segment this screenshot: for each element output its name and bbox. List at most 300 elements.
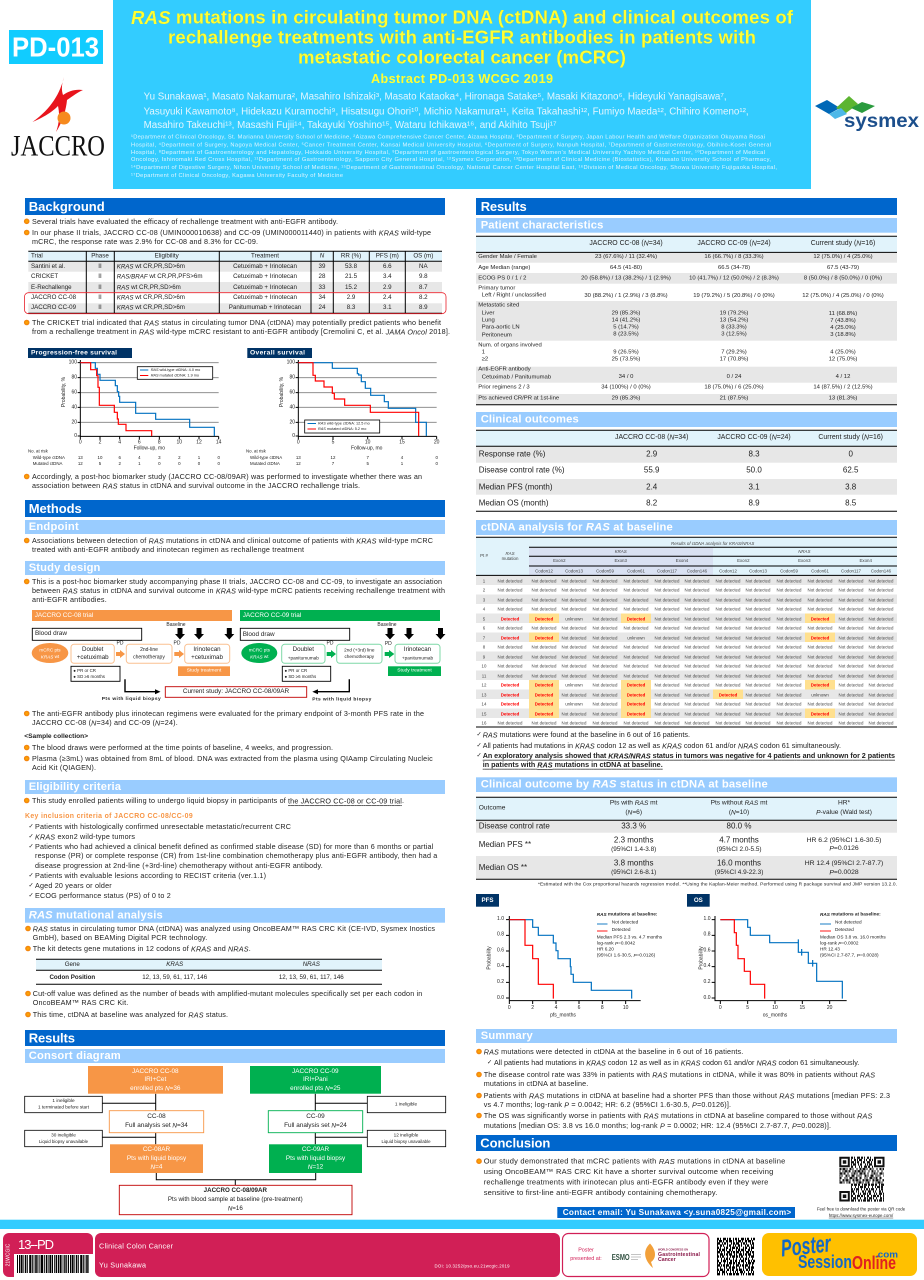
table: ctDNA analysis: Not detected	[716, 606, 741, 611]
bullets: cut-off	[25, 989, 422, 1019]
chart: overall survival: 20	[289, 419, 295, 425]
table: ctDNA analysis: Not detected	[808, 654, 833, 659]
table: ctDNA analysis: unknown	[811, 692, 829, 697]
summary text: Patients with RAS mutations in ctDNA at baseline had a shorter PFS than those without RAS mutations [median PFS: 2.3	[484, 1091, 890, 1100]
table: codon positions: Codon Position	[49, 974, 95, 981]
table: ctDNA analysis: Not detected	[624, 587, 649, 592]
consort diagram: Liquid biopsy unavailable	[39, 1139, 89, 1144]
table: ctDNA analysis: Not detected	[685, 663, 710, 668]
chart: OS by RAS status: 0.0	[704, 995, 711, 1001]
notes under ctDNA table: in patients with RAS mutations in ctDNA at baseline.	[483, 760, 663, 769]
chart: progression-free survival: Mutated ctDNA	[33, 461, 63, 466]
table: clinical outcomes: 2.9	[646, 450, 658, 458]
table: ctDNA analysis: Not detected	[624, 673, 649, 678]
table: ctDNA analysis: Not detected	[808, 701, 833, 706]
diagram: study design CC-09: +panitumumab	[402, 656, 433, 660]
key inclusion criteria: ✓	[28, 882, 34, 889]
table: ctDNA analysis: Results of ctDNA analysis for KRAS/NRAS	[671, 541, 754, 546]
heading: Consort diagram	[25, 1049, 445, 1063]
table: ctDNA analysis: Not detected	[808, 644, 833, 649]
authors: Yu Sunakawa¹, Masato Nakamura², Masahiro Ishizaki³, Masato Kataoka⁴, Hironaga Satake⁵, Masaki Kitazono⁶, Hideyuki Yanagisawa⁷,	[144, 92, 727, 102]
table: ctDNA analysis: Not detected	[562, 606, 587, 611]
table: ctDNA analysis: Not detected	[746, 701, 771, 706]
table: ctDNA analysis: Not detected	[498, 597, 523, 602]
summary text: All patients had mutations in KRAS codon 12 as well as in KRAS codon 61 and/or NRAS codon 61 simultaneously.	[494, 1058, 859, 1067]
chart: PFS by RAS status: 0.2	[497, 979, 504, 985]
table: ctDNA analysis: Exon2	[553, 558, 566, 563]
table: patient characteristics: 7 (43.8%)	[830, 318, 856, 324]
table: prior rechallenge trials: 39	[319, 263, 326, 270]
table: patient characteristics: Anti-EGFR antibody	[478, 367, 531, 373]
chart: overall survival: RAS mutated ctDNA: 5.2 mo	[318, 427, 366, 431]
table: ctDNA analysis: Detected	[811, 711, 830, 716]
logo: sysmex	[815, 96, 919, 132]
table: outcome by RAS status: 16.0 months	[717, 858, 761, 868]
sample collection: <Sample collection>	[24, 733, 88, 740]
table: ctDNA analysis: Not detected	[869, 720, 894, 725]
chart: PFS by RAS status: log-rank P=0.0042	[597, 940, 636, 946]
table: ctDNA analysis: Not detected	[685, 587, 710, 592]
consort diagram: Pts with blood sample at baseline (pre-treatment)	[168, 1196, 303, 1203]
table: patient characteristics: 7 (29.2%)	[721, 349, 747, 355]
consort diagram: Pts with liquid biopsy	[286, 1155, 346, 1162]
table: ctDNA analysis: 6	[483, 625, 486, 630]
table: ctDNA analysis: Not detected	[869, 578, 894, 583]
table: ctDNA analysis: Codon59	[780, 568, 798, 573]
table: ctDNA analysis: Not detected	[746, 654, 771, 659]
table: outcome by RAS status: P=0.0028	[829, 869, 859, 876]
summary text: RAS mutations were detected in ctDNA at the baseline in 6 out of 16 patients.	[484, 1047, 743, 1056]
poster title: metastatic colorectal cancer (mCRC)	[298, 46, 626, 68]
consort diagram: N=12	[308, 1163, 324, 1170]
table: ctDNA analysis: 12	[482, 682, 487, 687]
table: ctDNA analysis: Not detected	[562, 663, 587, 668]
chart: OS by RAS status: 0	[719, 1005, 722, 1011]
table: ctDNA analysis: Not detected	[777, 711, 802, 716]
table: ctDNA analysis: Not detected	[655, 673, 680, 678]
chart: OS by RAS status: 15	[800, 1005, 805, 1011]
notes under ctDNA table: ✓	[476, 752, 482, 759]
chart: progression-free survival: 3	[158, 455, 161, 460]
table: ctDNA analysis: Exon4	[859, 558, 872, 563]
table: outcome by RAS status: Median OS **	[479, 863, 527, 872]
chart: progression-free survival: 100	[69, 360, 77, 366]
table: ctDNA analysis: Not detected	[498, 578, 523, 583]
heading: Results: Results	[29, 1030, 75, 1046]
table: ctDNA analysis: Not detected	[839, 711, 864, 716]
footer: poster presented at: WORLD CONGRESS ON	[658, 1248, 688, 1252]
heading: Summary: Summary	[481, 1030, 533, 1042]
table: ctDNA analysis: Not detected	[716, 635, 741, 640]
table: ctDNA analysis: Not detected	[746, 673, 771, 678]
diagram: study design CC-08: PD	[174, 641, 181, 647]
heading: Methods: Methods	[29, 501, 82, 516]
table: patient characteristics: JACCRO CC-09 (N=24)	[697, 240, 771, 247]
consort diagram: CC-09	[306, 1113, 325, 1120]
chart: progression-free survival: 0	[158, 461, 161, 466]
table: patient characteristics: 17 (70.8%)	[720, 356, 748, 362]
table: outcome by RAS status	[476, 797, 897, 887]
sample collection: The blood draws were performed at the time points of baseline, 4 weeks, and progression.	[32, 743, 333, 752]
table: ctDNA analysis: Not detected	[655, 701, 680, 706]
heading: ctDNA analysis: ctDNA analysis for RAS at baseline	[481, 522, 673, 534]
chart: overall survival: 80	[289, 375, 295, 381]
table: prior rechallenge trials: 8.9	[419, 304, 428, 311]
heading: Clinical outcomes: Clinical outcomes	[481, 414, 579, 426]
table: patient characteristics: 8 (50.0%) / 8 (50.0%) / 0 (0%)	[804, 275, 882, 281]
table: patient characteristics: 21 (87.5%)	[720, 396, 748, 402]
chart: progression-free survival: 40	[71, 404, 77, 410]
table: patient characteristics: 18 (75.0%) / 6 (25.0%)	[704, 385, 764, 391]
table: outcome by RAS status: 4.7 months	[719, 836, 759, 844]
heading: Background: Background	[29, 199, 105, 214]
table: clinical outcomes: 8.9	[748, 498, 760, 508]
table: codon positions: 12, 13, 59, 61, 117, 146	[142, 974, 208, 981]
chart: PFS by RAS status: PFS	[481, 897, 494, 904]
table: ctDNA analysis: Not detected	[839, 654, 864, 659]
table: ctDNA analysis: Not detected	[562, 625, 587, 630]
chart: PFS by RAS status: pfs_months	[550, 1012, 576, 1018]
table: patient characteristics: Metastatic sited	[478, 303, 519, 309]
chart: overall survival: 7	[366, 455, 369, 460]
table: ctDNA analysis: Not detected	[777, 597, 802, 602]
summary text: ✓	[487, 1059, 492, 1066]
table: outcome by RAS status: P-value (Wald test)	[816, 809, 872, 816]
table: outcome by RAS status: Pts with RAS mt	[610, 800, 658, 806]
table: ctDNA analysis: 10	[482, 663, 487, 668]
table: ctDNA analysis: Not detected	[746, 692, 771, 697]
table: ctDNA analysis: Not detected	[746, 587, 771, 592]
table: ctDNA analysis: 13	[482, 692, 487, 697]
consort diagram: enrolled pts N=25	[290, 1085, 341, 1092]
table: ctDNA analysis: Not detected	[808, 673, 833, 678]
table: ctDNA analysis: Not detected	[777, 720, 802, 725]
table: patient characteristics: 23 (67.6%) / 11 (32.4%)	[595, 254, 657, 260]
table: ctDNA analysis: Not detected	[869, 673, 894, 678]
table: ctDNA analysis: Not detected	[562, 587, 587, 592]
chart: progression-free survival: 4	[118, 440, 121, 446]
key inclusion criteria: ✓	[28, 892, 34, 899]
table: ctDNA analysis: Detected	[627, 692, 646, 697]
diagram: study design CC-09: mCRC pts	[249, 648, 271, 652]
footer: PosterSessionOnline logo: .com	[875, 1250, 898, 1260]
chart: progression-free survival: 1	[198, 455, 201, 460]
heading: Summary	[476, 1029, 897, 1043]
diagram: study design CC-08: +cetuximab	[77, 654, 109, 661]
table: patient characteristics: 13 (81.3%)	[829, 396, 857, 402]
chart: overall survival: 12	[331, 455, 336, 460]
table: patient characteristics: 64.5 (41-80)	[610, 265, 642, 271]
consort diagram: N=16	[228, 1205, 243, 1212]
consort diagram: CC-09AR	[302, 1146, 330, 1153]
table: ctDNA analysis: Not detected	[839, 663, 864, 668]
chart: OS by RAS status: Median OS 3.8 vs. 16.0 months	[820, 934, 886, 940]
chart: progression-free survival: 2	[99, 440, 102, 446]
table: clinical outcomes	[476, 430, 897, 511]
table: outcome by RAS status: (95%CI 4.9-22.3)	[715, 869, 763, 876]
table: ctDNA analysis: Not detected	[839, 692, 864, 697]
table: ctDNA analysis: Detected	[535, 701, 554, 706]
table: ctDNA analysis: Not detected	[869, 663, 894, 668]
table: outcome by RAS status: HR 6.2 (95%CI 1.6-30.5)	[807, 837, 881, 844]
logo: JACCRO: JACCRO	[11, 130, 105, 162]
heading: Clinical outcome by RAS status: Clinical outcome by RAS status in ctDNA at baseline	[481, 779, 768, 791]
chart: PFS by RAS status: HR 6.20	[597, 946, 614, 952]
table: prior rechallenge trials: 8.3	[347, 304, 356, 311]
table: ctDNA analysis: 14	[482, 701, 487, 706]
heading: Conclusion: Conclusion	[480, 1136, 550, 1150]
table: ctDNA analysis: Codon59	[596, 568, 614, 573]
diagram: study design CC-09	[240, 610, 446, 681]
table: ctDNA analysis: Not detected	[624, 578, 649, 583]
table: prior rechallenge trials: 15.2	[345, 284, 358, 291]
conclusion text	[476, 1156, 785, 1197]
bullets: intro: Several trials have evaluated the efficacy of rechallenge treatment with anti-EGFR antibody.	[32, 217, 338, 226]
consort diagram	[25, 1066, 446, 1215]
bullets: intro	[24, 217, 431, 246]
chart: progression-free survival: Probability, %	[61, 376, 67, 407]
bullets: RAS assay: GmbH), based on BEAMing Digital PCR technology.	[33, 933, 207, 942]
bullets: cut-off: This time, ctDNA at baseline was analyzed for RAS status.	[33, 1010, 228, 1019]
diagram: study design CC-08: ● PR or CR	[73, 668, 96, 673]
contact email: Contact email: Yu Sunakawa <y.suna0825@gmail.com>	[563, 1208, 791, 1217]
table: ctDNA analysis: Not detected	[562, 692, 587, 697]
table: prior rechallenge trials	[24, 251, 446, 314]
chart: overall survival: Wild-type ctDNA	[250, 455, 282, 460]
table: ctDNA analysis: Not detected	[685, 692, 710, 697]
table: ctDNA analysis: Not detected	[498, 644, 523, 649]
table: ctDNA analysis: Detected	[535, 616, 554, 621]
table: ctDNA analysis: Exon3	[798, 558, 811, 563]
table: ctDNA analysis: Not detected	[685, 635, 710, 640]
chart: progression-free survival: 2	[118, 461, 121, 466]
chart: overall survival: 5	[366, 461, 369, 466]
bullet: primary endpoint: JACCRO CC-08 (N=34) and CC-09 (N=24).	[32, 718, 178, 727]
table: ctDNA analysis: Not detected	[808, 663, 833, 668]
chart: PFS by RAS status: RAS mutations at baseline:	[597, 912, 658, 917]
table: ctDNA analysis: Not detected	[808, 578, 833, 583]
table: ctDNA analysis: 5	[483, 616, 486, 621]
table: outcome by RAS status: (95%CI 2.0-5.5)	[716, 846, 762, 853]
footer: PosterSessionOnline logo	[762, 1230, 917, 1276]
table: ctDNA analysis: Not detected	[869, 701, 894, 706]
table: patient characteristics: Num. of organs involved	[478, 343, 542, 349]
diagram: study design CC-08	[32, 610, 234, 681]
table: patient characteristics: Lung	[482, 318, 495, 324]
table: patient characteristics: 29 (85.3%)	[612, 310, 640, 316]
chart: OS by RAS status: 20	[827, 1005, 833, 1011]
table: outcome by RAS status: (N=6)	[625, 809, 642, 816]
bullet: study design text: This is a post-hoc biomarker study accompanying phase II trials, JACCRO CC-08 and CC-09, to investigate an association	[32, 577, 442, 586]
table: patient characteristics: 14 (41.2%)	[612, 317, 640, 323]
table: patient characteristics: 19 (79.2%) / 5 (20.8%) / 0 (0%)	[693, 293, 775, 299]
poster id badge: PD-013	[12, 32, 99, 62]
table: ctDNA analysis: Detected	[501, 711, 520, 716]
heading: Methods	[25, 500, 445, 517]
table: ctDNA analysis: Not detected	[839, 720, 864, 725]
current study box with arrows	[102, 679, 372, 703]
table: ctDNA analysis: Not detected	[716, 682, 741, 687]
bullet: study design text: between RAS status in ctDNA and survival outcome in KRAS wild-type mCRC patients receiving rechallenge treatment with	[32, 586, 445, 595]
heading: Background	[25, 198, 445, 215]
table: prior rechallenge trials: KRAS wt CR,PR,SD>6m	[117, 304, 185, 311]
chart: OS by RAS status: 1.0	[704, 916, 711, 922]
heading: Results	[476, 198, 897, 215]
footer: session info	[95, 1233, 560, 1277]
table: ctDNA analysis: unknown	[565, 616, 583, 621]
diagram: study design CC-08: Irinotecan	[193, 646, 221, 653]
diagram: study design CC-08: Baseline	[166, 622, 186, 628]
table: clinical outcomes: Disease control rate (%)	[479, 466, 565, 474]
chart: PFS by RAS status: Probability	[486, 946, 492, 970]
table: ctDNA analysis: Not detected	[593, 673, 618, 678]
diagram: study design CC-08: Doublet	[82, 646, 104, 653]
table: ctDNA analysis: Detected	[627, 616, 646, 621]
chart: progression-free survival: 2	[178, 455, 181, 460]
table: ctDNA analysis: KRAS	[615, 549, 627, 554]
table: ctDNA analysis: Not detected	[532, 578, 557, 583]
chart: OS by RAS status: Probability	[698, 946, 704, 970]
abstract line: Abstract PD-013 WCGC 2019	[371, 72, 553, 86]
chart: overall survival: 0	[297, 440, 300, 446]
chart: PFS by RAS status: 8	[601, 1005, 604, 1011]
table: ctDNA analysis: Not detected	[685, 701, 710, 706]
diagram: study design CC-09: Irinotecan	[404, 646, 432, 653]
table: ctDNA analysis: Not detected	[655, 720, 680, 725]
chart: PFS by RAS status: 4	[555, 1005, 558, 1011]
table: prior rechallenge trials: JACCRO CC-09	[31, 304, 77, 311]
table: outcome by RAS status: HR 12.4 (95%CI 2.7-87.7)	[805, 860, 883, 867]
table: ctDNA analysis: Not detected	[624, 644, 649, 649]
table: ctDNA analysis: Not detected	[498, 606, 523, 611]
chart: OS by RAS status: os_months	[763, 1013, 788, 1019]
chart: OS by RAS status: 5	[746, 1005, 749, 1011]
table: patient characteristics: ≥2	[482, 357, 488, 363]
table: ctDNA analysis: RAS	[505, 551, 515, 556]
key inclusion criteria: ✓	[28, 843, 34, 850]
table: ctDNA analysis: Not detected	[777, 587, 802, 592]
diagram: study design CC-09: chemotherapy	[344, 654, 375, 659]
table: outcome by RAS status: HR*	[838, 800, 850, 806]
table: outcome by RAS status: Outcome	[479, 804, 506, 812]
table: ctDNA analysis: Not detected	[685, 597, 710, 602]
table: ctDNA analysis: Not detected	[716, 616, 741, 621]
table: ctDNA analysis: Not detected	[655, 578, 680, 583]
bullets: cut-off: OncoBEAM™ RAS CRC Kit.	[33, 998, 128, 1007]
key inclusion criteria: response (PR) or complete response (CR) from 1st-line combination chemotherapy plus anti-EGFR antibody, then had a	[35, 851, 437, 860]
table: ctDNA analysis: Codon146	[871, 568, 892, 573]
table: ctDNA analysis: Not detected	[532, 625, 557, 630]
table: patient characteristics: 19 (79.2%)	[720, 310, 748, 316]
summary text: vs 4.7 months; log-rank P = 0.0042; HR: 6.2 (95%CI 1.6-30.5, P=0.0126)].	[484, 1100, 731, 1109]
table: outcome by RAS status: Disease control rate	[479, 822, 550, 830]
chart: PFS by RAS status: 1.0	[497, 916, 504, 922]
table: clinical outcomes: JACCRO CC-08 (N=34)	[615, 434, 688, 441]
summary text	[476, 1047, 890, 1130]
table: ctDNA analysis: Not detected	[532, 720, 557, 725]
bullet: study design text	[24, 577, 445, 604]
table: codon positions: 12, 13, 59, 61, 117, 146	[279, 974, 344, 981]
table: ctDNA analysis: Not detected	[655, 635, 680, 640]
table: ctDNA analysis: Not detected	[808, 587, 833, 592]
table: ctDNA analysis: Not detected	[869, 692, 894, 697]
table: ctDNA analysis: Not detected	[655, 682, 680, 687]
diagram: study design CC-08: 2nd-line	[140, 647, 158, 653]
table: ctDNA analysis: Not detected	[777, 654, 802, 659]
table: prior rechallenge trials: Santini et al.	[31, 263, 65, 270]
consort diagram: 12 ineligible	[394, 1132, 419, 1138]
bullet: CRICKET: from a rechallenge treatment in RAS wild-type mCRC resistant to anti-EGFR antibody [Cremolini C, et al. JAMA Oncol 2018].	[32, 327, 450, 336]
table: clinical outcomes: Median OS (month)	[479, 498, 549, 508]
chart: overall survival: 1	[401, 461, 404, 466]
table: patient characteristics: Liver	[482, 311, 495, 317]
table: ctDNA analysis: Not detected	[839, 635, 864, 640]
affiliations: Hospital, ⁸Department of Gastroenterology and Hepatology, Hokkaido University Hospital, ⁹Department of gastroenterological Surgery, Tokyo Women's Medical University Yachiyo Medical Center, ¹⁰Department of Medical	[131, 149, 765, 156]
table: ctDNA analysis: Detected	[627, 682, 646, 687]
table: ctDNA analysis: Not detected	[685, 625, 710, 630]
table: clinical outcomes: 62.5	[843, 466, 859, 474]
diagram: study design CC-08: mCRC pts	[39, 648, 61, 652]
heading: Eligibility criteria	[25, 780, 445, 794]
table: patient characteristics: 30 (88.2%) / 1 (2.9%) / 3 (8.8%)	[584, 293, 668, 299]
consort diagram: 30 ineligible	[51, 1132, 76, 1138]
table: patient characteristics: 13 (54.2%)	[720, 317, 748, 323]
footer: poster presented at: Poster	[578, 1248, 594, 1254]
table: ctDNA analysis: Not detected	[685, 682, 710, 687]
chart: progression-free survival: Follow-up, mo	[134, 445, 165, 451]
table: ctDNA analysis: unknown	[565, 701, 583, 706]
table: prior rechallenge trials: KRAS wt CR,PR,SD>6m	[117, 294, 185, 301]
key inclusion criteria: Patients who had achieved a clinical benefit defined as confirmed stable disease (SD) for more than 6 months or partial	[35, 842, 434, 851]
diagram: study design CC-09: PD	[327, 641, 334, 647]
table: ctDNA analysis: Not detected	[869, 654, 894, 659]
table: outcome by RAS status: 3.8 months	[614, 858, 653, 868]
consort diagram: JACCRO CC-08	[132, 1068, 179, 1075]
chart: overall survival: Probability, %	[279, 376, 285, 407]
chart: PFS by RAS status: Not detected	[612, 920, 639, 924]
table: ctDNA analysis: Not detected	[746, 616, 771, 621]
table: patient characteristics: Primary tumor	[478, 286, 515, 292]
chart: OS by RAS status: 10	[772, 1005, 778, 1011]
table: prior rechallenge trials: 2.4	[383, 294, 392, 301]
table: ctDNA analysis: Codon117	[841, 568, 862, 573]
diagram: study design CC-09: ● SD ≥6 months	[284, 674, 317, 679]
table: prior rechallenge trials: 8.2	[419, 294, 428, 301]
chart: progression-free survival: Wild-type ctDNA	[33, 455, 65, 460]
footer: poster presented at: Gastrointestinal	[658, 1252, 701, 1258]
table: ctDNA analysis: Not detected	[808, 720, 833, 725]
affiliations: Oncology, Ishinomaki Red Cross Hospital, ¹¹Department of Gastroenterology, Sapporo City General Hospital, ¹²Sysmex Corporation, ¹³Department of Clinical Medicine (Biostatistics), Kitasato University School of Pharmacy,	[131, 157, 771, 163]
table: ctDNA analysis: Not detected	[593, 597, 618, 602]
table: ctDNA analysis: Not detected	[746, 606, 771, 611]
chart: progression-free survival: 10	[177, 440, 182, 446]
table: ctDNA analysis: Not detected	[532, 663, 557, 668]
QR caption: https://www.sysmex-europe.com/	[829, 1213, 894, 1218]
chart: overall survival: 20	[434, 440, 440, 446]
table: ctDNA analysis: Not detected	[624, 625, 649, 630]
table: ctDNA analysis: Not detected	[746, 682, 771, 687]
table: codon positions: Gene	[65, 961, 80, 968]
table: patient characteristics: 8 (23.5%)	[613, 331, 639, 337]
table: ctDNA analysis: Not detected	[532, 654, 557, 659]
table: outcome by RAS status: Pts without RAS mt	[711, 800, 768, 806]
chart: OS by RAS status: 0.8	[704, 932, 711, 938]
table: prior rechallenge trials: 6.6	[383, 263, 392, 270]
table: ctDNA analysis: Not detected	[839, 673, 864, 678]
table: outcome by RAS status: (95%CI 1.4-3.8)	[611, 846, 656, 853]
chart: PFS by RAS status: 10	[623, 1005, 629, 1011]
table: ctDNA analysis: Not detected	[716, 625, 741, 630]
